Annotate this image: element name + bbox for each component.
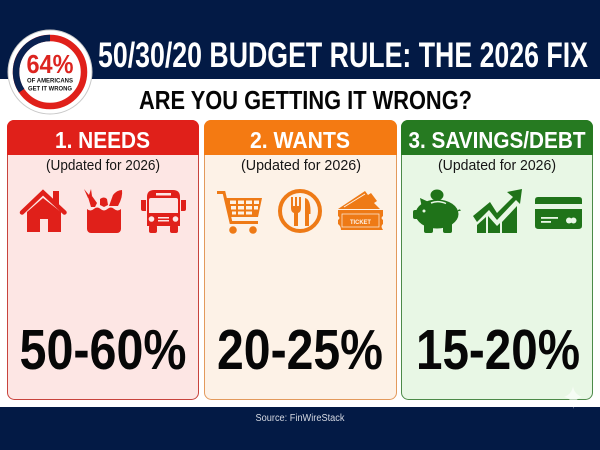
needs header <box>7 120 199 155</box>
panel: wants <box>204 120 397 400</box>
wants header <box>204 120 397 155</box>
wants percentage: 20-25% <box>217 318 383 382</box>
badge: 64% of Americans get it wrong <box>8 30 92 114</box>
savings note: (Updated for 2026) <box>438 158 556 174</box>
icon: growth chart <box>473 189 522 233</box>
wants heading: 2. WANTS <box>250 127 350 153</box>
badge: 64% of Americans get it wrong: OF AMERICANS <box>27 78 73 84</box>
needs note: (Updated for 2026) <box>46 158 160 174</box>
wants note: (Updated for 2026) <box>241 158 361 174</box>
panel: savings and debt <box>401 120 593 400</box>
icon: tickets <box>338 191 383 230</box>
icon: house <box>22 191 64 232</box>
badge: 64% of Americans get it wrong: GET IT WRONG <box>28 86 72 92</box>
badge: 64% of Americans get it wrong: 64% <box>26 49 74 79</box>
subtitle: ARE YOU GETTING IT WRONG? <box>139 85 472 115</box>
watermark sparkle <box>564 386 582 409</box>
icon: plate with cutlery <box>280 191 320 231</box>
icon: piggy bank <box>413 190 460 233</box>
icon: bus <box>141 190 186 233</box>
panel: needs <box>7 120 199 400</box>
icon: credit card <box>535 197 582 229</box>
bottom navy footer <box>0 407 600 450</box>
needs heading: 1. NEEDS <box>55 127 150 153</box>
icon: tickets: TICKET <box>350 219 371 226</box>
savings header <box>401 120 593 155</box>
top navy banner <box>0 0 600 79</box>
icon: grocery bag <box>84 189 122 233</box>
icon: shopping cart <box>217 192 262 234</box>
source note: Source: FinWireStack <box>256 413 345 424</box>
needs percentage: 50-60% <box>20 318 186 382</box>
